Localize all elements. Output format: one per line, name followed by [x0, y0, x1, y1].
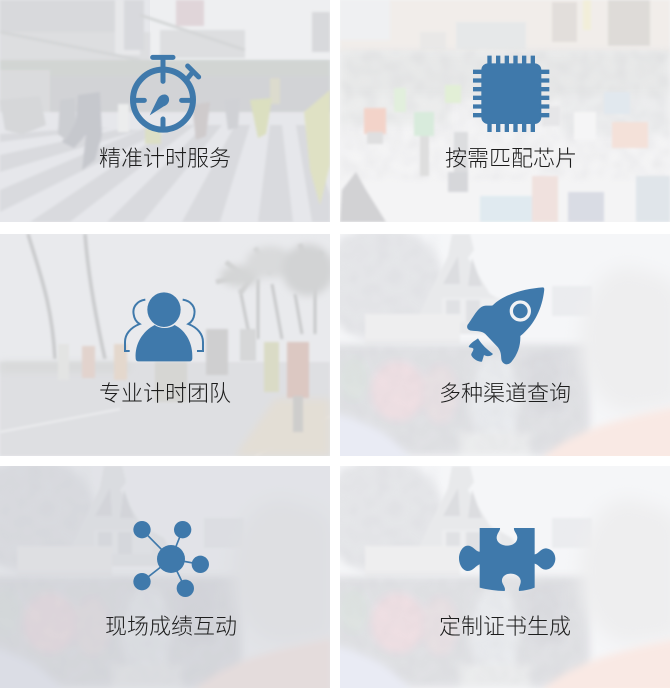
background: palm trees and rainy seaside run — [0, 234, 330, 456]
label: 定制证书生成 — [439, 614, 571, 639]
background: runners on zebra crossing — [0, 0, 330, 222]
panel: multi-channel lookup — [340, 234, 670, 456]
label: 精准计时服务 — [99, 146, 231, 171]
icon: network nodes — [133, 521, 209, 597]
label: 现场成绩互动 — [105, 614, 237, 639]
icon: rocket — [467, 287, 544, 364]
label: 按需匹配芯片 — [445, 146, 577, 171]
icon: puzzle piece — [459, 528, 556, 591]
background: castle and crowd — [340, 234, 670, 456]
label: 专业计时团队 — [99, 381, 231, 406]
background: marathon crowd on city street — [340, 0, 670, 222]
runners — [0, 90, 330, 205]
background: castle and crowd — [340, 466, 670, 688]
panel: professional timing team — [0, 234, 330, 456]
panel: precise timing service — [0, 0, 330, 222]
icon: team of people — [124, 292, 204, 362]
stripes — [0, 125, 330, 222]
panel: on-demand chips — [340, 0, 670, 222]
panel: live results interaction — [0, 466, 330, 688]
panel: custom certificate generation — [340, 466, 670, 688]
label: 多种渠道查询 — [439, 381, 571, 406]
icon: stopwatch — [130, 54, 202, 133]
background: castle and crowd, darker — [0, 466, 330, 688]
icon: chip — [473, 56, 550, 132]
crowd — [340, 50, 670, 135]
